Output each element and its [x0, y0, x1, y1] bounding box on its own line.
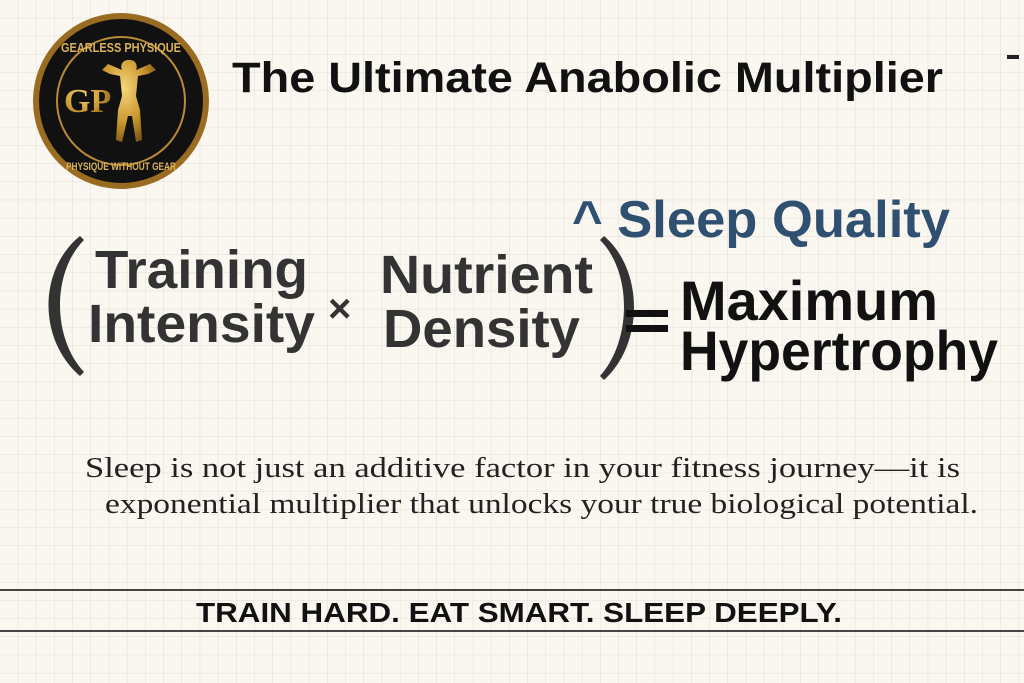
multiply sign: × [328, 287, 351, 331]
term: training intensity: Training [95, 240, 308, 300]
body text: Sleep is not just an additive factor in your fitness journey—it is [85, 453, 960, 484]
result: maximum hypertrophy [680, 269, 998, 382]
result: maximum hypertrophy: Maximum [680, 269, 938, 332]
body text: exponential multiplier that unlocks your true biological potential. [105, 489, 978, 520]
footer band: TRAIN HARD. EAT SMART. SLEEP DEEPLY. [196, 597, 842, 628]
term: training intensity [88, 240, 315, 354]
term: training intensity: Intensity [88, 294, 315, 354]
equation [48, 236, 998, 382]
term: nutrient density [380, 245, 593, 359]
right parenthesis [600, 236, 634, 380]
title: The Ultimate Anabolic Multiplier [232, 54, 943, 102]
equals [626, 310, 668, 332]
left parenthesis [48, 236, 84, 376]
body text [85, 453, 978, 520]
logo: GEARLESS PHYSIQUE [61, 40, 181, 55]
corner mark [1007, 55, 1019, 59]
term: nutrient density: Density [383, 299, 580, 359]
exponent: sleep quality: ^ Sleep Quality [572, 191, 950, 249]
logo: GP [64, 83, 111, 120]
term: nutrient density: Nutrient [380, 245, 593, 305]
logo [33, 13, 209, 189]
logo: PHYSIQUE WITHOUT GEAR [66, 161, 176, 173]
result: maximum hypertrophy: Hypertrophy [680, 319, 998, 382]
